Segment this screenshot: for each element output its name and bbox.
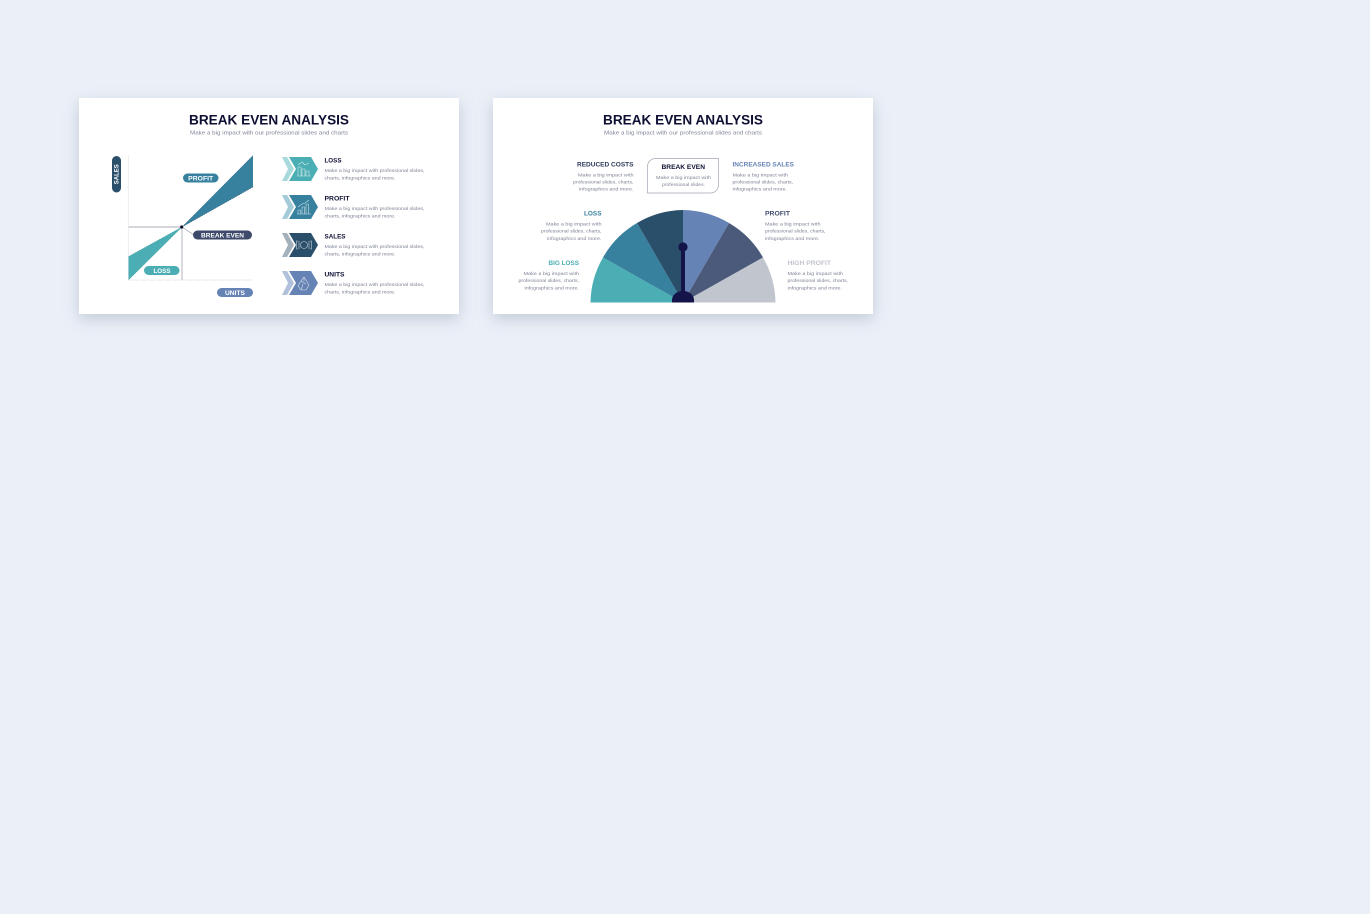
- text block: increased sales: INCREASED SALES: [732, 162, 794, 169]
- panel: line chart slide: [79, 98, 459, 314]
- callout: break even box: professional slides.: [662, 182, 705, 188]
- list item: profit: [282, 195, 424, 219]
- text block: big loss: infographics and more.: [524, 285, 579, 291]
- list item: sales: charts, infographics and more.: [324, 251, 396, 257]
- list item: units: Make a big impact with professional slides,: [324, 282, 424, 288]
- text block: increased sales: [732, 162, 794, 193]
- list item: loss: LOSS: [324, 157, 342, 164]
- text block: high profit: professional slides, charts,: [788, 278, 848, 284]
- wedge: loss: [603, 223, 683, 302]
- text block: profit: professional slides, charts,: [765, 229, 826, 235]
- text block: high profit: HIGH PROFIT: [788, 260, 831, 267]
- list item: profit: charts, infographics and more.: [324, 213, 396, 219]
- wedge: profit: [683, 223, 763, 302]
- list item: loss: Make a big impact with professional slides,: [324, 168, 424, 174]
- text block: profit: Make a big impact with: [765, 222, 821, 228]
- text block: loss: Make a big impact with: [546, 222, 602, 228]
- list item: sales: [282, 233, 424, 257]
- wedge: high profit: [683, 258, 776, 302]
- text block: big loss: [518, 260, 579, 291]
- text block: increased sales: Make a big impact with: [732, 172, 788, 178]
- subtitle: left slide: Make a big impact with our professional slides and charts: [190, 130, 348, 136]
- label: break even: [193, 230, 252, 240]
- gauge needle: [672, 242, 694, 302]
- text block: high profit: infographics and more.: [788, 285, 842, 291]
- icon: profit chevron: [282, 195, 318, 219]
- wedge: reduced costs: [637, 210, 683, 302]
- gauge chart: [590, 210, 776, 302]
- list item: loss: [282, 157, 424, 181]
- callout: break even box: Make a big impact with: [656, 175, 711, 181]
- list item: profit: PROFIT: [324, 195, 350, 202]
- text block: reduced costs: infographics and more.: [579, 187, 634, 193]
- text block: high profit: [788, 260, 848, 291]
- list item: units: [282, 271, 424, 295]
- text block: reduced costs: professional slides, charts,: [573, 180, 634, 186]
- text block: loss: [541, 211, 602, 242]
- text block: big loss: professional slides, charts,: [518, 278, 579, 284]
- list item: units: charts, infographics and more.: [324, 289, 396, 295]
- break-even chart: [127, 155, 253, 282]
- text block: loss: professional slides, charts,: [541, 229, 602, 235]
- text block: reduced costs: [573, 162, 634, 193]
- label: profit: [183, 174, 218, 182]
- text block: reduced costs: REDUCED COSTS: [577, 162, 634, 169]
- profit wedge: [182, 156, 253, 227]
- text block: big loss: Make a big impact with: [524, 271, 579, 277]
- label: units: [217, 288, 253, 297]
- text block: increased sales: infographics and more.: [732, 187, 787, 193]
- text block: reduced costs: Make a big impact with: [578, 172, 634, 178]
- label: loss: LOSS: [154, 268, 170, 275]
- title: right slide: BREAK EVEN ANALYSIS: [603, 112, 763, 128]
- loss wedge: [128, 227, 182, 280]
- label: profit: PROFIT: [188, 175, 213, 182]
- label: break even: BREAK EVEN: [201, 232, 244, 239]
- wedge: big loss: [590, 258, 683, 302]
- icon: units chevron: [282, 271, 318, 295]
- label: sales axis: [112, 156, 121, 192]
- text block: profit: [765, 211, 826, 242]
- text block: big loss: BIG LOSS: [548, 260, 579, 267]
- text block: loss: LOSS: [584, 211, 602, 218]
- panel: gauge slide: [493, 98, 873, 314]
- callout: break even box: [648, 158, 718, 193]
- label: sales axis: SALES: [113, 164, 120, 184]
- text block: high profit: Make a big impact with: [788, 271, 843, 277]
- subtitle: right slide: Make a big impact with our professional slides and charts: [604, 130, 762, 136]
- text block: profit: infographics and more.: [765, 236, 820, 242]
- list item: loss: charts, infographics and more.: [324, 175, 396, 181]
- list item: profit: Make a big impact with professional slides,: [324, 206, 424, 212]
- icon: loss chevron: [282, 157, 318, 181]
- wedge: increased sales: [683, 210, 729, 302]
- list item: sales: Make a big impact with professional slides,: [324, 244, 424, 250]
- callout: break even box: BREAK EVEN: [662, 164, 705, 171]
- text block: profit: PROFIT: [765, 211, 790, 218]
- list item: sales: SALES: [324, 233, 346, 240]
- label: units: UNITS: [225, 290, 245, 297]
- list item: units: UNITS: [324, 271, 344, 278]
- label: loss: [144, 266, 180, 275]
- icon: sales chevron: [282, 233, 318, 257]
- text block: loss: infographics and more.: [547, 236, 602, 242]
- title: left slide: BREAK EVEN ANALYSIS: [189, 112, 349, 128]
- text block: increased sales: professional slides, charts,: [732, 180, 793, 186]
